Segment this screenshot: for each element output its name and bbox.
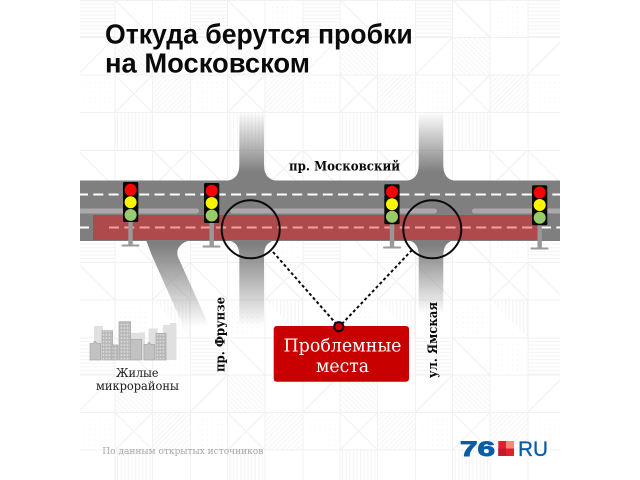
road: Moskovsky avenue <box>80 180 560 241</box>
upper lane dashes <box>78 194 560 196</box>
background grid pattern <box>80 0 560 480</box>
dotted connectors <box>273 250 412 327</box>
label: Frunze avenue: пр. Фрунзе <box>214 297 228 372</box>
title <box>105 18 413 78</box>
circle: problem spot at Yamskaya <box>403 200 461 258</box>
label: Moskovsky avenue: пр. Московский <box>289 160 400 175</box>
label: residential districts <box>96 365 179 393</box>
road: Yamskaya south <box>407 240 455 315</box>
road: Frunze south <box>227 240 276 328</box>
congested lane highlight <box>93 215 538 240</box>
logo: 76.RU: 76 <box>460 438 495 461</box>
title: Откуда берутся пробки <box>105 18 413 49</box>
road: Frunze north <box>223 112 280 181</box>
label: residential districts: Жилые <box>116 365 158 380</box>
label: residential districts: микрорайоны <box>96 378 179 393</box>
title: на Московском <box>105 47 310 78</box>
callout: problem spots: места <box>316 357 369 377</box>
logo: 76.RU: RU <box>518 438 548 461</box>
logo: 76.RU <box>460 438 548 461</box>
source note: По данным открытых источников <box>102 446 263 457</box>
traffic light 1 <box>122 182 140 246</box>
road: Yamskaya north <box>403 112 458 181</box>
traffic light 2 <box>202 183 220 248</box>
callout: problem spots <box>274 322 409 382</box>
icon: city skyline <box>90 322 176 360</box>
lower lane dashes <box>80 226 560 228</box>
traffic light 4 <box>530 185 548 250</box>
traffic light 3 <box>383 184 401 248</box>
road network <box>78 112 560 330</box>
road: diagonal to residential districts <box>146 240 211 330</box>
road median <box>80 208 560 214</box>
callout: problem spots: Проблемные <box>284 336 402 356</box>
circle: problem spot at Frunze <box>222 200 280 258</box>
label: Yamskaya street: ул. Ямская <box>426 302 441 378</box>
